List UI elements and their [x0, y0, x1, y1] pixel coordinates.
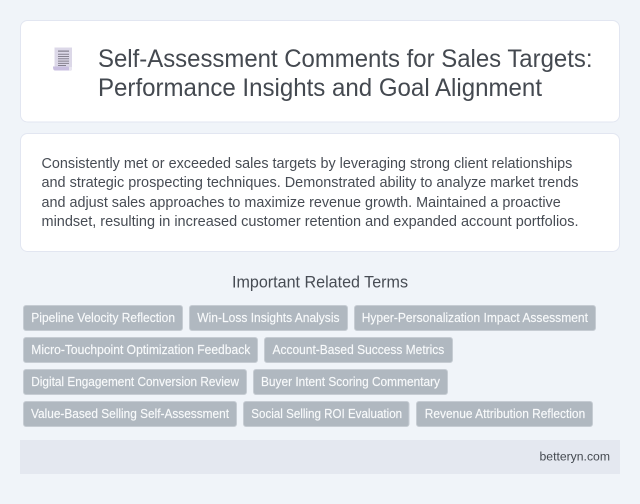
text block: summary paragraph — [42, 156, 578, 230]
title: Self-Assessment Comments for Sales Targets: — [98, 45, 592, 73]
tag: Pipeline Velocity Reflection: Pipeline Velocity Reflection — [31, 311, 175, 325]
tag: Hyper-Personalization Impact Assessment: Hyper-Personalization Impact Assessment — [362, 311, 588, 325]
tag: Revenue Attribution Reflection: Revenue Attribution Reflection — [425, 407, 585, 421]
tag: Buyer Intent Scoring Commentary: Buyer Intent Scoring Commentary — [261, 375, 441, 389]
tag: Account-Based Success Metrics — [264, 338, 452, 362]
tag: Digital Engagement Conversion Review — [24, 370, 246, 394]
footer bar — [20, 440, 620, 474]
text block: summary paragraph: mindset, resulting in increased customer retention and expanded account portfolios. — [42, 214, 578, 230]
tag: Social Selling ROI Evaluation: Social Selling ROI Evaluation — [251, 407, 402, 421]
tag: Win-Loss Insights Analysis: Win-Loss Insights Analysis — [197, 311, 340, 325]
text block: summary paragraph: and adjust sales approaches to maximize revenue growth. Maintained a proactive — [42, 195, 561, 211]
heading: important related terms: Important Related Terms — [232, 274, 408, 292]
tag: Micro-Touchpoint Optimization Feedback — [24, 338, 258, 362]
text block: summary paragraph: Consistently met or exceeded sales targets by leveraging strong client relationships — [42, 156, 572, 172]
tag: Value-Based Selling Self-Assessment — [24, 402, 236, 426]
tag: Buyer Intent Scoring Commentary — [254, 370, 448, 394]
title — [98, 45, 592, 102]
tag: Win-Loss Insights Analysis — [190, 306, 348, 330]
panel: header card — [20, 20, 620, 122]
text block: summary paragraph: and strategic prospecting techniques. Demonstrated ability to analyze market trends — [42, 175, 578, 191]
tag: Account-Based Success Metrics: Account-Based Success Metrics — [272, 343, 444, 357]
tag: Pipeline Velocity Reflection — [24, 306, 182, 330]
tag: Revenue Attribution Reflection — [416, 402, 592, 426]
tag: Value-Based Selling Self-Assessment: Value-Based Selling Self-Assessment — [31, 407, 229, 421]
title: Performance Insights and Goal Alignment — [98, 74, 542, 102]
footer text: betteryn.com: betteryn.com — [540, 450, 610, 464]
icon: document receipt — [53, 48, 72, 71]
tag: Social Selling ROI Evaluation — [244, 402, 409, 426]
tag group: related terms — [24, 306, 596, 426]
tag: Micro-Touchpoint Optimization Feedback: Micro-Touchpoint Optimization Feedback — [31, 343, 251, 357]
panel: summary text card — [20, 134, 620, 252]
tag: Hyper-Personalization Impact Assessment — [354, 306, 596, 330]
tag: Digital Engagement Conversion Review: Digital Engagement Conversion Review — [31, 375, 240, 389]
